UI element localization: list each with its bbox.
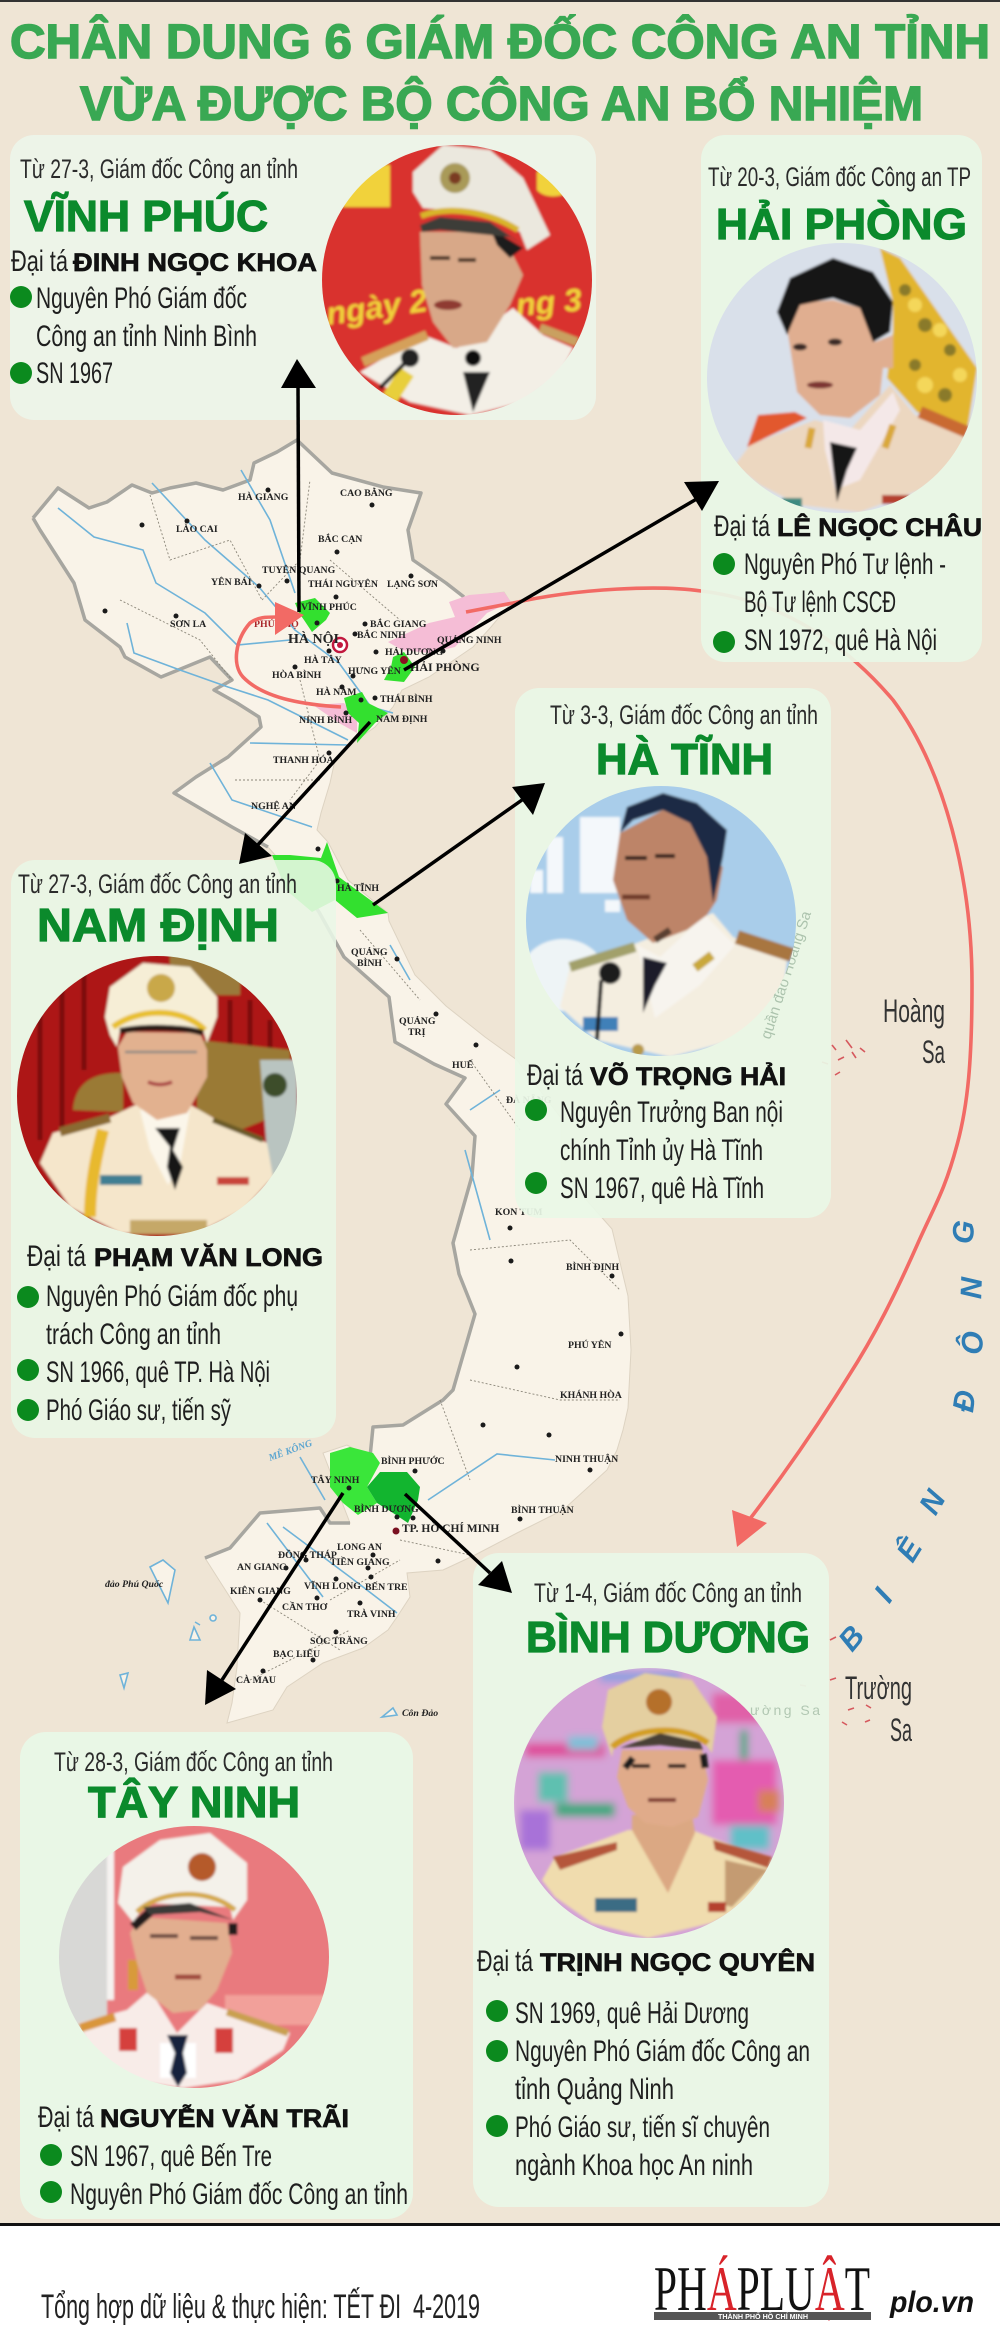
photo: Nam Định director — [15, 950, 300, 1240]
province labels: TRÀ VINH — [347, 1608, 396, 1620]
label: Biển Đông: Ô — [955, 1331, 990, 1355]
province labels: HÀ TÂY — [304, 654, 342, 666]
province labels: ĐỒNG THÁP — [278, 1548, 337, 1561]
logo: Pháp Luật: THÀNH PHỐ HỒ CHÍ MINH — [718, 2311, 808, 2321]
province labels: NGHỆ AN — [251, 799, 296, 812]
province labels: HẢI PHÒNG — [410, 660, 480, 674]
arrow: to Nam Định — [239, 722, 370, 864]
sea labels — [800, 993, 990, 1748]
details: ngành Khoa học An ninh — [515, 2149, 753, 2182]
name: LÊ NGỌC CHÂU — [777, 512, 982, 542]
label: Hoàng Sa: Sa — [922, 1034, 945, 1070]
details — [40, 2140, 408, 2211]
arrow: to Vĩnh Phúc — [281, 359, 316, 612]
arrow: to Bình Dương — [405, 1494, 512, 1593]
province labels: TÂY NINH — [311, 1474, 360, 1486]
subtitle: Từ 3-3, Giám đốc Công an tỉnh — [550, 700, 818, 730]
province labels: BÌNH — [357, 957, 382, 969]
province borders — [120, 480, 620, 1680]
province labels: TRỊ — [408, 1027, 426, 1038]
province labels: AN GIANG — [237, 1562, 287, 1573]
faint text: quần đảo Trường Sa: ường Sa — [750, 1702, 820, 1718]
subtitle: Từ 1-4, Giám đốc Công an tỉnh — [534, 1578, 802, 1608]
photo: Tây Ninh director — [55, 1820, 335, 2095]
label: Biển Đông: N — [913, 1484, 953, 1520]
arrowhead — [275, 602, 304, 635]
label: Biển Đông: B — [832, 1620, 871, 1658]
panel: Nam Định — [11, 860, 336, 1438]
name: NGUYỄN VĂN TRÃI — [100, 2103, 349, 2133]
province labels: BẠC LIÊU — [273, 1648, 320, 1660]
panel: Hải Phòng — [700, 135, 982, 662]
label: Hoàng Sa: Hoàng — [883, 993, 945, 1029]
faint text: quần đảo Hoàng Sa: quần đảo Hoàng Sa — [758, 908, 815, 1041]
details: trách Công an tỉnh — [46, 1318, 221, 1351]
details: Nguyên Phó Giám đốc Công an tỉnh — [70, 2178, 408, 2211]
islands — [120, 1560, 397, 1717]
province labels: BÌNH THUẬN — [511, 1503, 574, 1516]
province labels: CẦN THƠ — [282, 1600, 328, 1613]
highlighted provinces — [272, 592, 511, 1523]
province labels: CÀ MAU — [236, 1674, 276, 1686]
name: Đại tá — [527, 1059, 583, 1092]
name: Đại tá — [38, 2101, 94, 2134]
province labels: HÒA BÌNH — [272, 669, 322, 681]
name: VÕ TRỌNG HẢI — [590, 1061, 786, 1091]
name: TRỊNH NGỌC QUYÊN — [540, 1947, 815, 1977]
land border — [33, 440, 475, 1558]
site name: plo.vn — [889, 2286, 974, 2319]
name: PHẠM VĂN LONG — [94, 1243, 323, 1272]
province labels: PHÚ THỌ — [254, 618, 299, 630]
province labels: Côn Đảo — [402, 1708, 438, 1719]
province labels: KHÁNH HÒA — [560, 1389, 622, 1401]
province labels: TP. HỒ CHÍ MINH — [402, 1520, 499, 1535]
photo: Bình Dương director — [510, 1665, 790, 1945]
details: Phó Giáo sư, tiến sỹ — [46, 1394, 231, 1427]
subtitle: Từ 28-3, Giám đốc Công an tỉnh — [54, 1747, 333, 1777]
province labels: BÌNH ĐỊNH — [566, 1261, 619, 1273]
photo: Hà Tĩnh director — [520, 780, 805, 1060]
province labels: NINH THUẬN — [555, 1452, 618, 1465]
name — [11, 245, 317, 278]
details: SN 1967, quê Bến Tre — [70, 2140, 272, 2173]
province labels: LONG AN — [337, 1542, 382, 1553]
label: Biển Đông: Đ — [947, 1388, 983, 1414]
label: Trường Sa: Trường — [845, 1670, 912, 1706]
label: Biển Đông: G — [946, 1219, 982, 1245]
province labels: THANH HÓA — [273, 754, 334, 766]
city dots — [102, 488, 624, 1674]
details: Nguyên Trưởng Ban nội — [560, 1096, 783, 1129]
province labels: CAO BẰNG — [340, 486, 393, 499]
details: Phó Giáo sư, tiến sĩ chuyên — [515, 2111, 770, 2144]
name — [714, 510, 982, 543]
title — [10, 14, 990, 131]
details — [17, 1280, 298, 1427]
heading: HẢI PHÒNG — [716, 199, 967, 249]
province labels: LÀO CAI — [176, 523, 218, 535]
footer — [0, 2223, 1000, 2341]
details: Công an tỉnh Ninh Bình — [36, 320, 257, 353]
details: Nguyên Phó Giám đốc phụ — [46, 1280, 298, 1313]
details: Nguyên Phó Giám đốc — [36, 282, 247, 315]
province labels: QUẢNG — [351, 946, 388, 958]
province labels — [105, 486, 622, 1719]
name — [27, 1240, 323, 1273]
panel: Vĩnh Phúc — [10, 135, 596, 420]
heading: HÀ TĨNH — [596, 734, 773, 784]
name — [477, 1945, 815, 1978]
details: Bộ Tư lệnh CSCĐ — [744, 586, 896, 619]
icon: Hanoi star — [333, 638, 347, 652]
heading: TÂY NINH — [88, 1777, 300, 1827]
details: Nguyên Phó Giám đốc Công an — [515, 2035, 810, 2068]
province labels: PHÚ YÊN — [568, 1339, 611, 1351]
credit: Tổng hợp dữ liệu & thực hiện: TẾT ĐI 4-2019 — [41, 2288, 480, 2326]
arrowhead — [732, 1510, 767, 1547]
panel: Hà Tĩnh — [515, 688, 831, 1218]
label: Biển Đông — [832, 1219, 990, 1658]
name — [527, 1059, 786, 1092]
province labels: THÁI NGUYÊN — [308, 578, 378, 590]
subtitle: Từ 27-3, Giám đốc Công an tỉnh — [18, 869, 297, 899]
details: SN 1967 — [36, 357, 113, 390]
name: Đại tá — [27, 1240, 86, 1273]
details: tỉnh Quảng Ninh — [515, 2073, 674, 2106]
province labels: LẠNG SƠN — [387, 579, 438, 590]
province labels: TIỀN GIANG — [330, 1555, 390, 1568]
details — [486, 1997, 810, 2182]
details: SN 1967, quê Hà Tĩnh — [560, 1172, 764, 1205]
province labels: BẮC CẠN — [318, 532, 362, 545]
map of Vietnam — [33, 440, 631, 1723]
details: SN 1969, quê Hải Dương — [515, 1997, 749, 2030]
province labels: HUẾ — [452, 1058, 474, 1071]
province labels: NAM ĐỊNH — [376, 714, 428, 725]
province labels: SƠN LA — [170, 619, 206, 630]
province labels: BẾN TRE — [365, 1580, 408, 1593]
label: Biển Đông: I — [868, 1582, 900, 1608]
name: Đại tá — [714, 510, 770, 543]
heading: BÌNH DƯƠNG — [526, 1612, 810, 1662]
islands — [800, 1040, 871, 1725]
province labels: ĐÀ NẴNG — [506, 1093, 552, 1106]
province labels: BÌNH DƯƠNG — [354, 1503, 419, 1515]
heading: NAM ĐỊNH — [37, 899, 279, 951]
label: Trường Sa: Sa — [890, 1712, 912, 1748]
province labels: QUẢNG NINH — [437, 634, 502, 646]
province labels: SÓC TRĂNG — [310, 1635, 368, 1647]
name: Đại tá — [477, 1945, 533, 1978]
photo: Vĩnh Phúc director — [320, 140, 596, 420]
details: chính Tỉnh ủy Hà Tĩnh — [560, 1134, 763, 1167]
label: Biển Đông: N — [955, 1275, 989, 1299]
label: Hoàng Sa — [883, 993, 945, 1070]
province labels: HẢI DƯƠNG — [385, 646, 444, 658]
photo: Vĩnh Phúc director: ngày 2 — [324, 282, 430, 332]
label: Biển Đông: Ê — [890, 1532, 930, 1568]
logo: Pháp Luật: PHÁPLUẬT — [654, 2253, 870, 2324]
province labels: VĨNH LONG — [304, 1580, 361, 1592]
subtitle: Từ 27-3, Giám đốc Công an tỉnh — [20, 154, 298, 184]
name — [38, 2101, 349, 2134]
province labels: HÀ NAM — [316, 686, 357, 698]
province labels: KON TUM — [495, 1207, 542, 1218]
province labels: đảo Phú Quốc — [105, 1579, 164, 1590]
province labels: HƯNG YÊN — [348, 665, 401, 677]
title: CHÂN DUNG 6 GIÁM ĐỐC CÔNG AN TỈNH — [10, 14, 990, 69]
province labels: VĨNH PHÚC — [301, 601, 357, 613]
red curved arrow: Ninh Bình to Phú Thọ — [236, 602, 341, 707]
province labels: QUẢNG — [399, 1015, 436, 1027]
province labels: BẮC NINH — [357, 628, 406, 641]
province labels: KIÊN GIANG — [230, 1585, 291, 1597]
province labels: YÊN BÁI — [211, 576, 252, 588]
name: ĐINH NGỌC KHOA — [73, 249, 317, 277]
province labels: HÀ GIANG — [238, 491, 289, 503]
arrow: to Tây Ninh — [205, 1493, 343, 1705]
province labels: THÁI BÌNH — [380, 693, 433, 705]
province labels: HÀ TĨNH — [337, 882, 379, 894]
province labels: TUYÊN QUANG — [262, 564, 336, 576]
details — [525, 1096, 783, 1205]
rivers — [58, 470, 555, 1613]
label: Trường Sa — [845, 1670, 912, 1748]
panel: Bình Dương — [473, 1553, 829, 2207]
panel: Tây Ninh — [20, 1732, 413, 2219]
name: Đại tá — [11, 245, 68, 278]
province labels: BẮC GIANG — [370, 617, 427, 630]
land mass — [33, 440, 631, 1723]
province labels: MÊ KÔNG — [266, 1436, 314, 1464]
title: VỪA ĐƯỢC BỘ CÔNG AN BỔ NHIỆM — [80, 76, 923, 131]
province labels: BÌNH PHƯỚC — [381, 1455, 445, 1467]
details — [10, 282, 257, 390]
details: SN 1966, quê TP. Hà Nội — [46, 1356, 270, 1389]
arrow: to Hải Phòng — [404, 481, 719, 670]
province labels: HÀ NỘI — [288, 630, 339, 647]
arrow: to Hà Tĩnh — [373, 783, 545, 905]
red curved arrow: Quảng Ninh to Bình Dương — [466, 588, 972, 1547]
details — [713, 548, 946, 657]
photo: Vĩnh Phúc director: ng 3 — [514, 281, 583, 323]
province labels: NINH BÌNH — [299, 714, 352, 726]
photo: Hải Phòng director — [700, 240, 980, 515]
heading: VĨNH PHÚC — [24, 191, 268, 241]
